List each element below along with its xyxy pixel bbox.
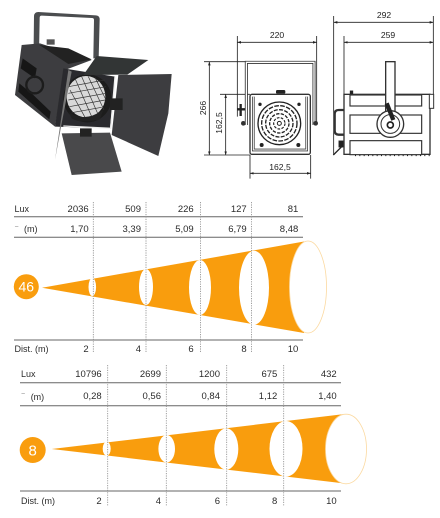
table rules <box>14 217 303 340</box>
row: beam diameter: ¯ <box>20 393 26 400</box>
row: beam diameter <box>20 391 337 402</box>
row: distance: Dist. (m) <box>21 496 55 506</box>
row: beam diameter: 6,79 <box>228 224 247 235</box>
housing <box>335 94 434 155</box>
row: lux: 1200 <box>199 369 220 380</box>
angle badge 8: 8 <box>29 442 37 460</box>
housing <box>237 90 318 154</box>
row: distance: 4 <box>136 344 141 355</box>
row: beam diameter: (m) <box>31 392 44 402</box>
angle badge 8 <box>20 437 46 463</box>
beam cone <box>52 414 366 484</box>
lens with wire grid <box>63 74 111 122</box>
row: lux: 127 <box>231 204 247 215</box>
yoke bracket <box>33 12 100 72</box>
yoke <box>246 62 314 125</box>
row: distance <box>21 496 337 507</box>
row: distance: 10 <box>326 496 337 507</box>
top barn door <box>83 56 148 75</box>
dimension labels: 266 <box>198 101 208 115</box>
dimension labels: 162,5 <box>214 112 224 134</box>
row: lux: 10796 <box>75 369 102 380</box>
width dimension 220 <box>237 41 317 44</box>
row: beam diameter: 1,40 <box>318 391 337 402</box>
row: distance <box>14 344 298 355</box>
row: lux <box>21 369 337 380</box>
row: beam diameter: (m) <box>24 224 38 234</box>
row: distance: Dist. (m) <box>14 344 48 354</box>
lamp body <box>15 39 115 128</box>
row: lux: 2699 <box>140 369 161 380</box>
row: lux: Lux <box>21 369 36 379</box>
row: distance: 8 <box>241 344 247 355</box>
dimension labels: 162,5 <box>269 162 291 172</box>
length dimension 292 <box>334 21 433 24</box>
fan grille <box>258 102 301 145</box>
row: distance: 6 <box>215 496 220 507</box>
angle badge 46: 46 <box>19 278 34 294</box>
row: beam diameter: 0,56 <box>142 391 161 402</box>
row: distance: 10 <box>288 344 298 355</box>
dimension labels: 259 <box>381 30 395 40</box>
row: distance: 8 <box>272 496 277 507</box>
right barn door <box>112 74 172 156</box>
row: distance: 2 <box>96 496 102 507</box>
row: distance: 6 <box>188 344 194 355</box>
height dimension 266 <box>208 62 211 155</box>
side view technical drawing <box>333 16 434 155</box>
row: beam diameter: 8,48 <box>280 224 298 235</box>
row: beam diameter: 1,70 <box>70 224 89 235</box>
row: lux: Lux <box>14 204 30 214</box>
photo: fresnel spotlight with barn doors <box>15 12 172 175</box>
bottom dimension 162,5 <box>250 172 311 175</box>
table rules <box>20 383 341 491</box>
row: lux: 509 <box>125 204 141 215</box>
left barn door edge <box>55 70 72 160</box>
row: beam diameter: 0,28 <box>83 391 102 402</box>
row: lux: 81 <box>288 204 298 215</box>
length dimension 259 <box>344 41 433 44</box>
dimension labels: 292 <box>377 10 391 20</box>
row: beam diameter: 0,84 <box>202 391 220 402</box>
chart: 46 degree beam <box>14 202 327 355</box>
row: lux: 2036 <box>68 204 89 215</box>
row: beam diameter <box>14 224 298 235</box>
row: lux: 675 <box>261 369 277 380</box>
dimension labels <box>198 10 395 172</box>
extension lines <box>334 16 433 155</box>
row: distance: 2 <box>83 344 89 355</box>
extension lines <box>204 36 317 179</box>
row: beam diameter: ¯ <box>14 226 19 233</box>
row: lux: 432 <box>321 369 337 380</box>
dimension labels: 220 <box>270 30 284 40</box>
row: beam diameter: 3,39 <box>122 224 141 235</box>
yoke arm and pivot <box>377 62 404 137</box>
height dimension 162,5 <box>224 94 227 155</box>
door hinges <box>80 98 123 137</box>
front view technical drawing <box>204 36 318 179</box>
angle badge 46 <box>14 274 39 299</box>
beam cone <box>42 241 326 333</box>
bottom barn door <box>62 133 122 175</box>
row: lux <box>14 204 298 215</box>
chart: 8 degree beam <box>20 365 366 507</box>
row: beam diameter: 5,09 <box>175 224 194 235</box>
row: distance: 4 <box>156 496 161 507</box>
row: lux: 226 <box>178 204 194 215</box>
small fittings <box>333 91 430 155</box>
row: beam diameter: 1,12 <box>259 391 277 402</box>
